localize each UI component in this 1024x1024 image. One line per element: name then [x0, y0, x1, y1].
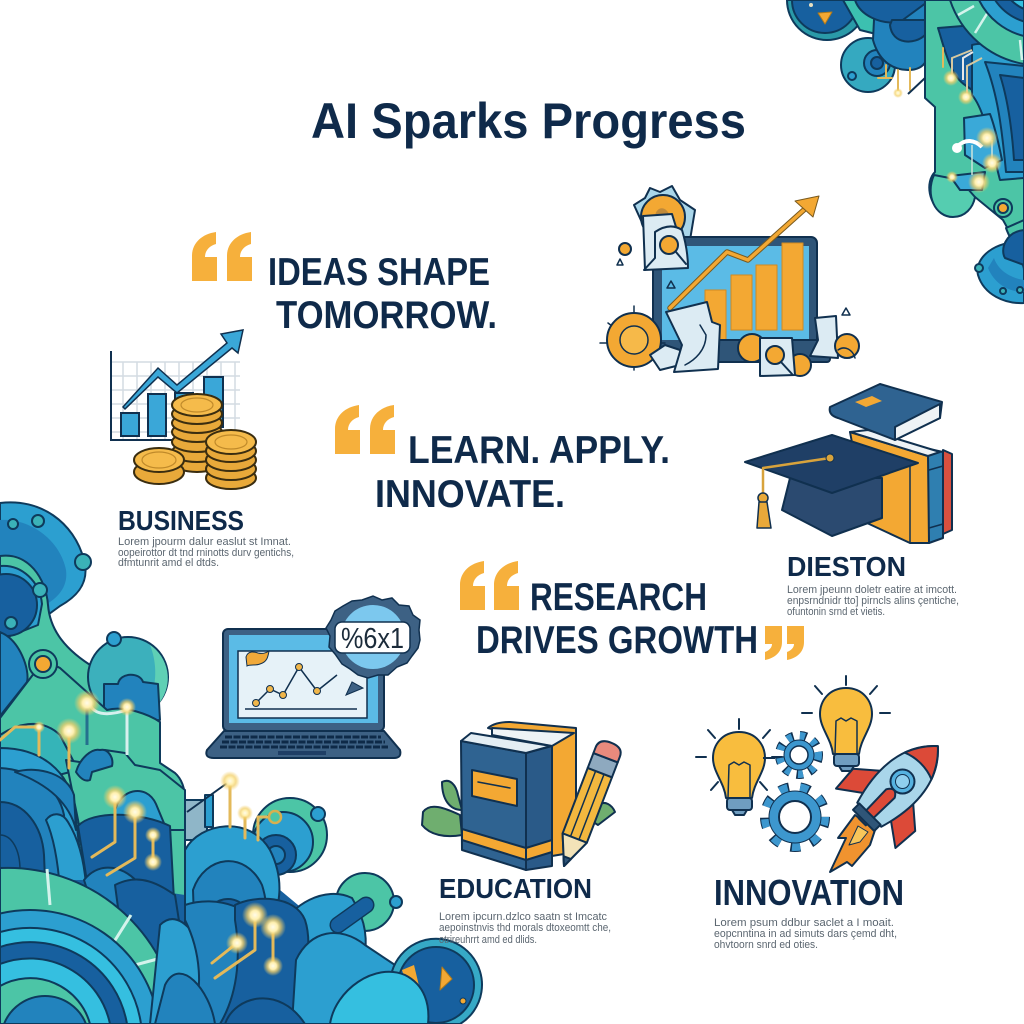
front book: [461, 733, 552, 870]
quote 3: research drives growth: RESEARCH: [530, 576, 707, 619]
circuit traces top-right: [878, 48, 1002, 193]
front cyan blob: [330, 972, 428, 1024]
quote 1: ideas shape tomorrow: TOMORROW.: [276, 294, 497, 337]
left leaves: [422, 781, 462, 836]
blue mass: [855, 0, 930, 70]
right leaves: [590, 803, 615, 825]
icon: laptop with rising chart: [600, 186, 859, 376]
quote 2: learn apply innovate: [335, 405, 670, 516]
badge: [326, 596, 420, 695]
magnifier paper and coins: [738, 334, 811, 376]
body text: innovation: eopcnntina in ad simuts dars çemd dht,: [714, 928, 897, 940]
lid: [223, 629, 384, 731]
keyboard base: [700, 340, 830, 362]
body text: innovation: ohvtoorn snrd ed oties.: [714, 939, 818, 951]
orange node top-right: [994, 199, 1012, 217]
bulb right: [802, 676, 890, 771]
quote 1: ideas shape tomorrow: [192, 232, 497, 337]
bottom-left crumpled paper: [650, 302, 720, 372]
gear big: [766, 788, 824, 846]
book stack: [850, 430, 952, 543]
left column: [0, 724, 78, 790]
line chart: [245, 664, 357, 709]
top dome: [0, 502, 110, 720]
right ball: [253, 798, 327, 875]
small teal circle: [931, 175, 975, 217]
lower blobs: [150, 899, 400, 1024]
dark wave and arches: [938, 25, 1024, 190]
bars: [121, 377, 223, 436]
cap crown: [782, 478, 882, 536]
large arcs bottom-left: [0, 868, 179, 1024]
body text: business: oopeirottor dt tnd rninotts durv gentichs,: [118, 547, 294, 559]
body text: education: otrireuhrrt amd ed dlids.: [439, 934, 537, 946]
orange speech blob: [246, 651, 269, 666]
teal panel: [925, 0, 1024, 258]
grid: [111, 362, 240, 440]
axes: [111, 351, 178, 440]
icon: laptop with percent badge: [206, 596, 420, 758]
screen: [229, 635, 378, 723]
heading: education: EDUCATION: [439, 873, 592, 904]
right paper and coin: [810, 316, 859, 358]
orange node: [29, 650, 57, 678]
coin stack left: [134, 448, 184, 484]
body text: education: Lorem ipcurn.dzlco saatn st Imcatc: [439, 911, 607, 923]
dark top-left circle: [787, 0, 867, 40]
quote 3: research drives growth: DRIVES GROWTH: [476, 619, 758, 662]
chart panel: [238, 651, 367, 718]
spiky sun: [634, 186, 695, 240]
heading: dieston: DIESTON: [787, 551, 906, 582]
body text: education: [439, 911, 611, 946]
heading: business: BUSINESS: [118, 505, 244, 536]
rising arrow: [670, 196, 819, 308]
small machine: [185, 781, 230, 840]
quote 2: learn apply innovate: LEARN. APPLY.: [408, 429, 670, 472]
coin stack right: [206, 430, 256, 489]
laptop base: [206, 731, 400, 758]
body text: dieston: Lorem jpeunn doletr eatire at imcott.: [787, 584, 957, 596]
arrow: [123, 330, 243, 409]
tassel: [757, 454, 834, 528]
quote 1: ideas shape tomorrow: IDEAS SHAPE: [268, 251, 490, 294]
gear small: [763, 736, 818, 774]
heading: innovation: INNOVATION: [714, 872, 904, 913]
papers and magnifier top: [643, 214, 688, 270]
top book: [830, 384, 942, 440]
small ball: [841, 38, 895, 92]
icon: books and pencil: [422, 722, 623, 871]
laptop screen: [662, 246, 809, 340]
mid blobs: [78, 791, 402, 960]
stars: [617, 259, 850, 315]
body text: business: Lorem jpourm dalur easlut st Imnat.: [118, 536, 291, 548]
pac shape: [619, 243, 631, 255]
pencil: [552, 738, 623, 871]
rocket: [831, 715, 969, 853]
arches: [0, 748, 86, 905]
title: AI Sparks Progress: [311, 93, 746, 149]
teal body: [0, 664, 185, 905]
right dome: [975, 220, 1024, 303]
laptop frame: [653, 237, 817, 350]
rocket flame: [830, 815, 875, 872]
cap board: [745, 435, 918, 493]
dark circle: [390, 939, 482, 1024]
body text: innovation: Lorem psum ddbur saclet a I moait.: [714, 917, 894, 929]
lower backing mass: [0, 880, 420, 1024]
back book: [488, 722, 576, 856]
coin stack tall: [172, 394, 222, 472]
body text: dieston: enpsrndnidr tto] pirncls alins çentiche,: [787, 595, 959, 607]
bulb left: [696, 719, 782, 815]
body text: business: dfmtunrit amd el dtds.: [118, 557, 219, 569]
bubble: [88, 632, 168, 722]
circuit traces bottom-left: [0, 690, 286, 978]
body text: innovation: [714, 917, 897, 951]
body text: dieston: ofuntonin srnd et vietis.: [787, 606, 885, 618]
body text: education: aepoinstnvis thd morals dtoxeomtt che,: [439, 922, 611, 934]
icon: bulbs gears and rocket: [696, 676, 969, 872]
badge: %6x1: [341, 623, 404, 655]
bars: [705, 243, 803, 350]
icon: business chart with coins: [111, 330, 256, 489]
quote 3: research drives growth: [460, 561, 804, 662]
body text: business: [118, 536, 294, 569]
quote 2: learn apply innovate: INNOVATE.: [375, 473, 565, 516]
decoration: top-right circuit blobs: [787, 0, 1024, 303]
top-right arcs: [950, 0, 1024, 64]
body text: dieston: [787, 584, 959, 618]
target coin: [600, 306, 665, 370]
decoration: bottom-left circuit blobs: [0, 502, 482, 1024]
icon: graduation cap and books: [745, 384, 952, 543]
